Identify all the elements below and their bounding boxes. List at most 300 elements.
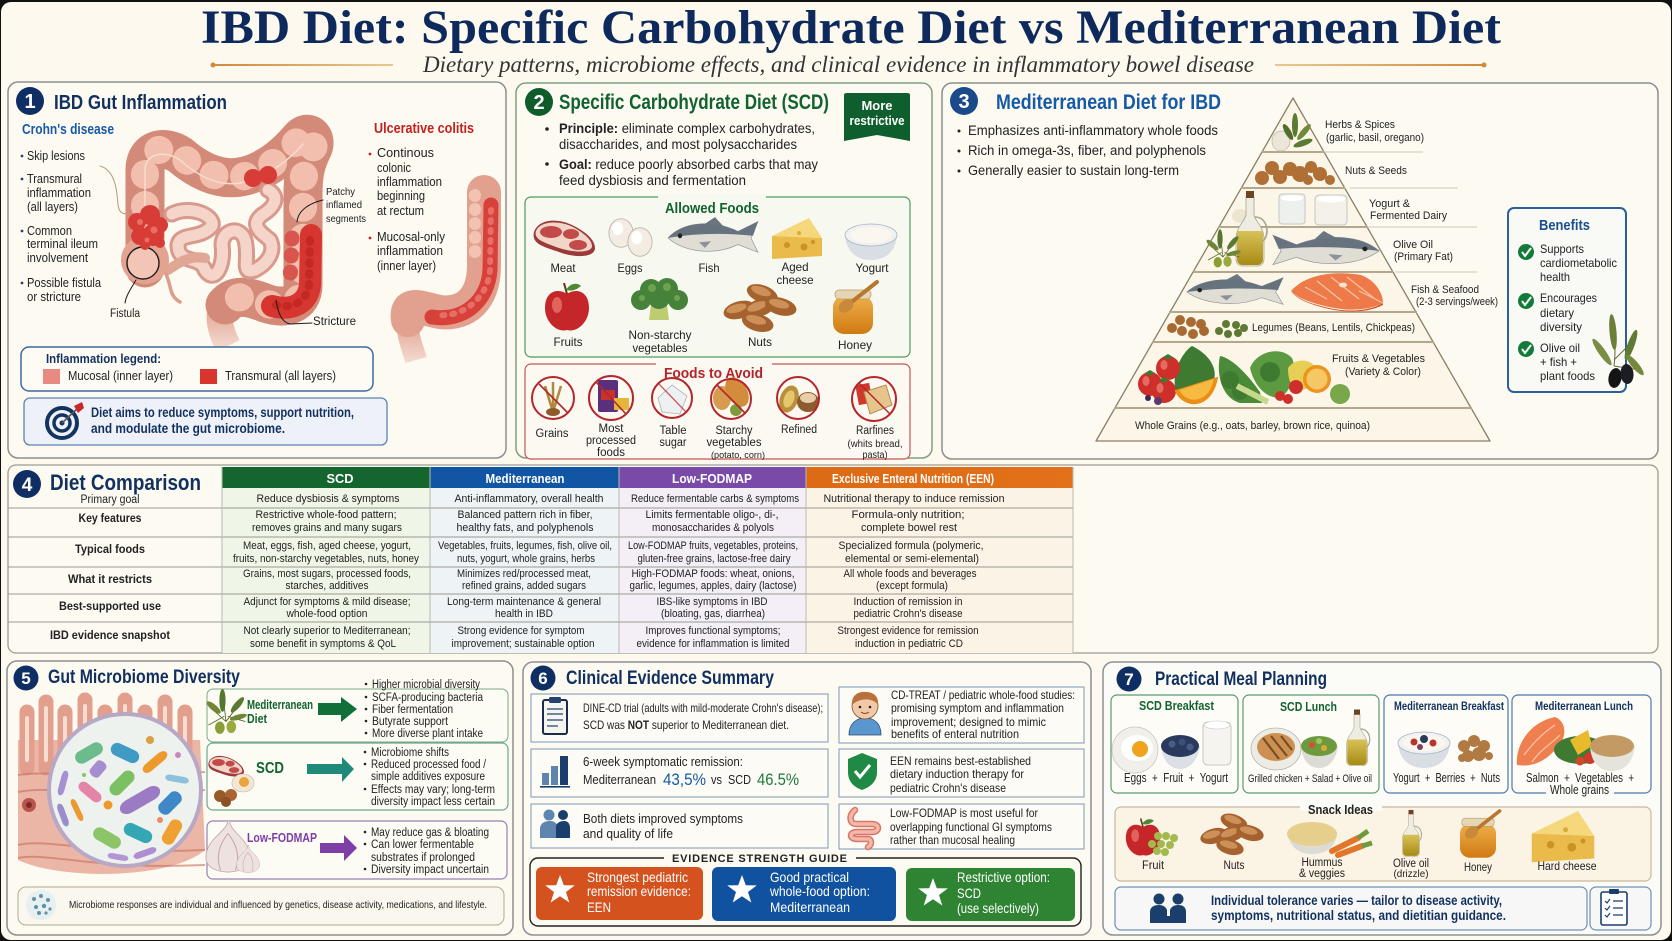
tile: practical option: Good practical [770, 869, 849, 885]
column: Mediterranean: Balanced pattern rich in fiber, [458, 509, 592, 521]
column: SCD: Adjunct for symptoms & mild disease; [244, 596, 410, 608]
column: Low-FODMAP: garlic, legumes, apples, dairy (lactose) [630, 580, 796, 592]
panel: Clinical evidence summary [523, 662, 1091, 935]
principle and goal: disaccharides, and most polysaccharides [559, 136, 797, 152]
Ulcerative colitis list [369, 121, 474, 273]
Crohn's disease list: (all layers) [27, 200, 78, 214]
pyramid labels: Fish & Seafood [1411, 284, 1479, 296]
evidence: remission rates: SCD [728, 772, 751, 787]
ribbon: more restrictive [844, 93, 910, 141]
icon: milk glass [1203, 721, 1231, 765]
inflammation legend: Inflammation legend: [46, 351, 161, 366]
row: Mediterranean diet: Diet [247, 712, 268, 726]
pyramid labels: Yogurt & [1369, 198, 1411, 210]
chart: food pyramid [1096, 98, 1498, 441]
benefits box: health [1540, 270, 1570, 284]
arrow: Mediterranean [318, 697, 357, 722]
evidence: CD-TREAT: CD-TREAT / pediatric whole-food studies: [891, 688, 1075, 702]
icon: bar chart [540, 756, 570, 788]
meal card: Mediterranean lunch: Salmon + Vegetables + [1526, 771, 1634, 785]
inflammation legend: Mucosal (inner layer) [68, 369, 173, 383]
panel: Diet comparison table [8, 465, 1658, 653]
allowed food labels: Eggs [618, 261, 642, 275]
illustration: ulcerative colitis colon [408, 192, 491, 360]
inflammation legend: Transmural (all layers) [225, 369, 336, 383]
evidence: EEN: dietary induction therapy for [890, 767, 1024, 781]
bullet list: Rich in omega-3s, fiber, and polyphenols [968, 142, 1206, 158]
annotation labels: Fistula [110, 308, 141, 320]
benefits box: Benefits [1539, 217, 1590, 234]
tile: strongest evidence [536, 867, 703, 920]
tier: herbs and garlic [1272, 113, 1313, 151]
pyramid labels: Nuts & Seeds [1345, 165, 1407, 177]
icon: apple [545, 283, 589, 330]
icon: olive oil bottle [1346, 710, 1370, 766]
pyramid labels: (2-3 servings/week) [1416, 296, 1498, 308]
column: Exclusive Enteral Nutrition: (except formula) [876, 580, 948, 592]
bullet list [958, 122, 1218, 178]
benefits box: Supports [1540, 242, 1584, 256]
column: Exclusive Enteral Nutrition: complete bowel rest [861, 522, 957, 534]
Crohn's disease list: inflammation [27, 186, 91, 200]
row labels: IBD evidence snapshot [50, 628, 170, 642]
evidence: EEN [839, 749, 1084, 797]
allowed food labels [550, 260, 889, 355]
icon: yogurt [845, 224, 897, 260]
snack labels: Honey [1464, 860, 1492, 874]
callout: diet aims [24, 398, 387, 445]
avoid food labels: Rarfines [856, 425, 894, 437]
foods to avoid box: Foods to Avoid [664, 365, 763, 382]
badge 7: 7 [1124, 670, 1134, 689]
row: Mediterranean diet: More diverse plant intake [372, 728, 483, 740]
icon: grains bowl [1590, 735, 1635, 771]
icon: fish [668, 217, 758, 252]
badge 2 [525, 88, 553, 116]
heading: Clinical Evidence Summary [566, 668, 774, 689]
pyramid labels: Olive Oil [1393, 239, 1433, 251]
icon: grilled chicken plate [1251, 728, 1301, 770]
tier: salmon [1291, 273, 1383, 312]
icon: honey [833, 282, 877, 334]
meal card: SCD lunch: Grilled chicken + Salad + Olive oil [1248, 773, 1372, 785]
icon: no starchy vegetables [711, 373, 754, 419]
badge 1: 1 [24, 91, 36, 113]
tier: olive oil and olives [1205, 191, 1267, 268]
evidence: DINE-CD trial: DINE-CD trial (adults with mild-moderate Crohn's disease); [583, 701, 823, 715]
evidence: both diets improved: Both diets improved symptoms [583, 811, 743, 826]
column: Mediterranean: healthy fats, and polyphenols [456, 522, 594, 534]
Ulcerative colitis list: Ulcerative colitis [374, 121, 474, 137]
avoid food labels: Most [598, 423, 624, 435]
foods to avoid box [525, 360, 910, 461]
Ulcerative colitis list: inflammation [377, 175, 442, 189]
heading: Gut Microbiome Diversity [48, 666, 240, 688]
column: Low-FODMAP: High-FODMAP foods: wheat, onions, [632, 568, 794, 580]
snack labels: & veggies [1299, 868, 1345, 880]
ribbon: more restrictive: restrictive [850, 113, 904, 128]
row: SCD: Effects may vary; long-term [371, 784, 495, 796]
column: Exclusive Enteral Nutrition: Specialized formula (polymeric, [838, 540, 984, 552]
icon: yogurt with berries [1398, 732, 1450, 768]
column: Mediterranean: health in IBD [495, 608, 553, 620]
avoid food labels: Table [660, 425, 686, 437]
meal card: Mediterranean lunch [1512, 695, 1651, 797]
allowed food labels: vegetables [632, 341, 688, 355]
tier: legumes [1167, 315, 1248, 339]
evidence strength guide: EVIDENCE STRENGTH GUIDE [672, 853, 848, 865]
subtitle: Dietary patterns, microbiome effects, and clinical evidence in inflammatory bowel disease [422, 52, 1254, 77]
evidence: Low-FODMAP: Low-FODMAP is most useful for [890, 806, 1038, 820]
avoid food labels: vegetables [706, 437, 762, 449]
row labels [50, 494, 170, 642]
column: SCD: some benefit in symptoms & QoL [250, 638, 396, 650]
snack labels: Fruit [1142, 858, 1165, 872]
Ulcerative colitis list: beginning [377, 189, 425, 203]
annotation labels: segments [326, 213, 366, 225]
badge 5: 5 [21, 669, 31, 688]
annotation labels: Stricture [313, 316, 356, 328]
Crohn's disease list: Skip lesions [27, 149, 85, 163]
allowed foods box: Allowed Foods [665, 200, 759, 217]
column: Mediterranean: Strong evidence for symptom [458, 625, 584, 637]
benefits box: Encourages [1540, 291, 1597, 305]
row: Mediterranean diet: Fiber fermentation [372, 704, 453, 716]
callout: diet aims: Diet aims to reduce symptoms, support nutrition, [91, 404, 354, 420]
column: Mediterranean: Long-term maintenance & general [447, 596, 601, 608]
Crohn's disease list: involvement [27, 251, 88, 265]
annotation labels: inflamed [326, 199, 362, 211]
evidence: Low-FODMAP: overlapping functional GI symptoms [890, 820, 1052, 834]
icon: clipboard [543, 697, 567, 734]
badge 3: 3 [958, 91, 970, 113]
row: SCD: SCD [256, 760, 284, 777]
icon: apple and grapes [1126, 818, 1178, 856]
badge 4: 4 [22, 475, 33, 496]
pyramid labels: Legumes (Beans, Lentils, Chickpeas) [1252, 322, 1415, 334]
callout: diet aims: and modulate the gut microbiome. [91, 420, 285, 436]
tile: strongest evidence: Strongest pediatric [587, 869, 688, 885]
avoid food labels: (potato, corn) [711, 450, 765, 460]
meal card: SCD breakfast [1111, 695, 1238, 793]
heading: Diet Comparison [50, 470, 201, 495]
icon: two people [1150, 894, 1186, 923]
icon: nuts [1199, 810, 1265, 858]
column: SCD: whole-food option [286, 608, 368, 620]
heading: Specific Carbohydrate Diet (SCD) [559, 91, 829, 114]
row labels: Primary goal [80, 494, 140, 506]
row: SCD: Microbiome shifts [371, 747, 449, 759]
callout: individual tolerance: symptoms, nutritional status, and dietitian guidance. [1211, 907, 1506, 923]
allowed food labels: Nuts [748, 335, 772, 349]
Crohn's disease list: terminal ileum [27, 237, 98, 251]
column: SCD [233, 493, 419, 650]
avoid food labels: (whits bread, [848, 439, 902, 450]
meal card: SCD breakfast: Eggs + Fruit + Yogurt [1124, 771, 1228, 785]
allowed food labels: Fruits [554, 335, 582, 349]
column: Low-FODMAP: monosaccharides & polyols [652, 522, 774, 534]
Ulcerative colitis list: (inner layer) [377, 259, 436, 273]
row: Low-FODMAP: Diversity impact uncertain [371, 864, 489, 876]
avoid food labels: sugar [660, 437, 687, 449]
avoid food labels: foods [597, 447, 625, 459]
panel: Specific Carbohydrate Diet [516, 83, 932, 461]
icon: blueberries [1161, 735, 1200, 769]
pyramid labels: Fermented Dairy [1370, 210, 1447, 222]
icon: checklist clipboard [1590, 887, 1651, 930]
ribbon: more restrictive: More [861, 98, 893, 113]
tile: practical option [712, 867, 896, 921]
allowed food labels: Fish [698, 261, 720, 275]
arrow: Low-FODMAP [320, 835, 357, 861]
row: Mediterranean diet [205, 679, 508, 742]
icon: egg on plate [1112, 727, 1158, 773]
benefits box [1508, 208, 1646, 392]
Ulcerative colitis list: at rectum [377, 204, 424, 218]
callout: individual tolerance [1115, 887, 1587, 930]
avoid food labels: Starchy [716, 425, 753, 437]
tile: strongest evidence: remission evidence: [587, 883, 691, 899]
principle and goal [545, 120, 818, 188]
column: Mediterranean [438, 493, 612, 650]
evidence: remission rates: Mediterranean [583, 772, 656, 787]
row labels: Key features [78, 511, 142, 525]
evidence: CD-TREAT: promising symptom and inflammation [891, 701, 1064, 715]
pyramid labels: (Variety & Color) [1345, 366, 1421, 378]
column: Exclusive Enteral Nutrition: Strongest evidence for remission [838, 625, 978, 637]
icon: intestine [851, 810, 878, 847]
row: SCD: diversity impact less certain [371, 796, 495, 808]
badge 3 [950, 87, 978, 115]
column: SCD: fruits, non-starchy vegetables, nuts, honey [233, 553, 419, 565]
column: Mediterranean: Vegetables, fruits, legumes, fish, olive oil, [438, 540, 612, 552]
heading: IBD Gut Inflammation [54, 92, 227, 114]
column: Exclusive Enteral Nutrition: All whole foods and beverages [844, 568, 977, 580]
column: SCD: Reduce dysbiosis & symptoms [256, 493, 400, 505]
column: Low-FODMAP: Improves functional symptoms; [646, 625, 780, 637]
row: Mediterranean diet: SCFA-producing bacteria [372, 692, 484, 704]
header row: SCD [326, 472, 354, 486]
benefits box: plant foods [1540, 369, 1595, 383]
row: Mediterranean diet: Higher microbial diversity [372, 679, 480, 691]
snack ideas box: Snack Ideas [1308, 802, 1373, 817]
column: Low-FODMAP: Low-FODMAP fruits, vegetables, proteins, [628, 540, 798, 552]
pyramid labels: Herbs & Spices [1325, 119, 1395, 131]
allowed food labels: cheese [776, 273, 814, 287]
Crohn's disease list: Transmural [27, 172, 82, 186]
header row: Low-FODMAP [672, 472, 752, 486]
bullet list: Emphasizes anti-inflammatory whole foods [968, 122, 1218, 138]
row: Low-FODMAP: May reduce gas & bloating [371, 827, 489, 839]
icon: olive branch [1590, 314, 1646, 389]
column: Low-FODMAP: gluten-free grains, lactose-free dairy [638, 553, 791, 565]
tier: fruits and vegetables [1138, 346, 1350, 409]
benefits box: + fish + [1540, 355, 1577, 369]
avoid food labels: pasta) [862, 450, 888, 461]
column: SCD: Not clearly superior to Mediterranean; [244, 625, 410, 637]
column: Low-FODMAP [628, 493, 799, 650]
illustration: petri dish of gut bacteria [49, 714, 201, 866]
Crohn's disease list: Crohn's disease [22, 122, 114, 138]
header row: Mediterranean [486, 472, 564, 486]
column: Exclusive Enteral Nutrition: Formula-only nutrition; [852, 509, 964, 521]
Ulcerative colitis list: inflammation [377, 244, 443, 258]
evidence: remission rates: 6-week symptomatic remission: [583, 754, 743, 769]
meal card: Mediterranean breakfast: Mediterranean Breakfast [1394, 699, 1504, 713]
row: Low-FODMAP [206, 821, 507, 879]
row: Low-FODMAP: substrates if prolonged [371, 852, 475, 864]
column: Low-FODMAP: evidence for inflammation is limited [636, 638, 790, 650]
column: Low-FODMAP: Reduce fermentable carbs & symptoms [631, 493, 799, 505]
column: Exclusive Enteral Nutrition [824, 493, 1004, 650]
evidence: EEN: pediatric Crohn's disease [890, 781, 1006, 795]
allowed food labels: Aged [782, 260, 808, 274]
column: Mediterranean: Anti-inflammatory, overall health [454, 493, 604, 505]
icon: no table sugar [652, 378, 692, 418]
column: Low-FODMAP: IBS-like symptoms in IBD [656, 596, 768, 608]
Crohn's disease list [21, 122, 114, 304]
header row [222, 467, 1073, 488]
icon: no processed foods [589, 376, 633, 420]
benefits box: cardiometabolic [1540, 256, 1617, 270]
meal card: Mediterranean breakfast: Yogurt + Berries + Nuts [1393, 771, 1500, 785]
illustration: intestinal tissue and villi [18, 700, 205, 874]
badge 1 [16, 87, 44, 115]
tile: restrictive option: Restrictive option: [957, 869, 1050, 885]
column: Mediterranean: nuts, yogurt, whole grains, herbs [457, 553, 595, 565]
evidence: DINE-CD trial: SCD was NOT superior to Mediterranean diet. [583, 718, 789, 732]
snack labels: (drizzle) [1394, 868, 1428, 880]
evidence: remission rates: 43,5% [663, 770, 706, 789]
benefits box: Olive oil [1540, 341, 1580, 355]
Crohn's disease list: or stricture [27, 290, 81, 304]
evidence: remission rates: 46.5% [757, 770, 799, 789]
meal card: Mediterranean lunch: Mediterranean Lunch [1535, 699, 1633, 713]
snack labels: Hard cheese [1538, 859, 1597, 873]
illustration: colon with Crohn's disease [100, 134, 323, 346]
heading: Mediterranean Diet for IBD [996, 91, 1221, 114]
icon: broccoli [631, 278, 688, 320]
column backgrounds [222, 488, 1073, 653]
evidence: CD-TREAT [839, 687, 1084, 743]
header row: Exclusive Enteral Nutrition (EEN) [832, 472, 994, 486]
allowed food labels: Honey [838, 338, 872, 352]
snack labels: Olive oil [1393, 858, 1429, 870]
Crohn's disease list: Possible fistula [27, 276, 101, 290]
tier: fish facing right [1273, 231, 1379, 265]
column: Exclusive Enteral Nutrition: pediatric Crohn's disease [854, 608, 962, 620]
column: SCD: starches, additives [286, 580, 369, 592]
column: Mediterranean: Minimizes red/processed meat, [457, 568, 591, 580]
meal card: Mediterranean lunch: Whole grains [1550, 783, 1609, 797]
tile: restrictive option: (use selectively) [957, 900, 1039, 916]
tile: restrictive option: SCD [957, 885, 981, 901]
icon: vegetables [1554, 730, 1606, 766]
avoid food labels: Grains [536, 428, 569, 440]
heading: Practical Meal Planning [1155, 669, 1327, 690]
pyramid labels [1135, 119, 1498, 432]
icon: people [540, 810, 570, 838]
icon: salmon steak [1517, 717, 1564, 766]
tile: strongest evidence: EEN [587, 899, 611, 915]
note: individual microbiome responses: Microbiome responses are individual and influenced by genetics, disease activity, medications, and lifestyle. [69, 899, 487, 911]
evidence: remission rates [531, 749, 828, 797]
icon: honey [1460, 811, 1500, 858]
badge 2: 2 [533, 92, 545, 114]
tile: practical option: whole-food option: [769, 883, 870, 899]
evidence: EEN: EEN remains best-established [890, 754, 1031, 768]
icon: child [849, 692, 881, 735]
allowed food labels: Yogurt [856, 261, 889, 275]
evidence: CD-TREAT: improvement; designed to mimic [891, 715, 1046, 729]
principle and goal: Goal: reduce poorly absorbed carbs that may [559, 156, 818, 172]
panel: Practical meal planning [1103, 662, 1661, 935]
pyramid labels: Whole Grains (e.g., oats, barley, brown rice, quinoa) [1135, 420, 1370, 432]
column: SCD: Restrictive whole-food pattern; [256, 509, 396, 521]
meal card: SCD lunch [1243, 695, 1379, 793]
evidence strength guide [530, 853, 1081, 926]
icon: aged cheese [772, 218, 822, 259]
row: SCD [207, 743, 508, 810]
row labels: Best-supported use [59, 599, 161, 613]
avoid food labels: processed [586, 435, 636, 447]
evidence: Low-FODMAP: rather than mucosal healing [890, 833, 1015, 847]
allowed food labels: Meat [550, 261, 576, 275]
evidence: Low-FODMAP [839, 804, 1084, 849]
snack labels [1142, 857, 1597, 880]
column: Exclusive Enteral Nutrition: Nutritional therapy to induce remission [824, 493, 1004, 505]
allowed foods box [525, 194, 910, 357]
column: Mediterranean: refined grains, added sugars [462, 580, 586, 592]
annotation labels [110, 186, 366, 328]
icon: salad bowl [1301, 736, 1338, 768]
column: Low-FODMAP: (bloating, gas, diarrhea) [661, 608, 765, 620]
evidence: both diets improved [531, 804, 828, 848]
tier: nuts and seeds [1255, 161, 1335, 185]
pyramid labels: (garlic, basil, oregano) [1326, 132, 1424, 144]
arrow: SCD [307, 757, 354, 782]
row: Mediterranean diet: Mediterranean [247, 698, 313, 712]
column: SCD: Grains, most sugars, processed foods, [243, 568, 411, 580]
column: Exclusive Enteral Nutrition: Induction of remission in [854, 596, 962, 608]
snack labels: Hummus [1302, 857, 1343, 869]
evidence: both diets improved: and quality of life [583, 826, 673, 841]
icon: meat, egg and nuts [208, 756, 254, 807]
badge 7 [1116, 666, 1142, 692]
benefits box: dietary [1540, 306, 1574, 320]
bullet list: Generally easier to sustain long-term [968, 162, 1179, 178]
tile: practical option: Mediterranean [770, 899, 850, 915]
icon: nuts [1458, 735, 1493, 762]
Ulcerative colitis list: Mucosal-only [377, 230, 446, 244]
icon: no refined white bread [852, 377, 896, 421]
tier: yogurt glasses [1232, 194, 1347, 225]
icon: garlic [206, 821, 260, 873]
icon: olive oil [1402, 810, 1422, 856]
row: SCD: simple additives exposure [371, 771, 485, 783]
panel: IBD gut inflammation [8, 82, 506, 458]
annotation labels: Patchy [326, 186, 356, 198]
icon: hard cheese [1532, 811, 1594, 862]
icon: almonds [722, 280, 798, 335]
row labels: What it restricts [68, 572, 152, 586]
row labels: Typical foods [75, 542, 145, 556]
evidence: CD-TREAT: benefits of enteral nutrition [891, 727, 1019, 741]
evidence: remission rates: vs [711, 772, 722, 787]
column: Exclusive Enteral Nutrition: elemental or semi-elemental) [845, 553, 979, 565]
avoid food labels: Refined [781, 424, 817, 436]
pyramid labels: (Primary Fat) [1394, 251, 1453, 263]
